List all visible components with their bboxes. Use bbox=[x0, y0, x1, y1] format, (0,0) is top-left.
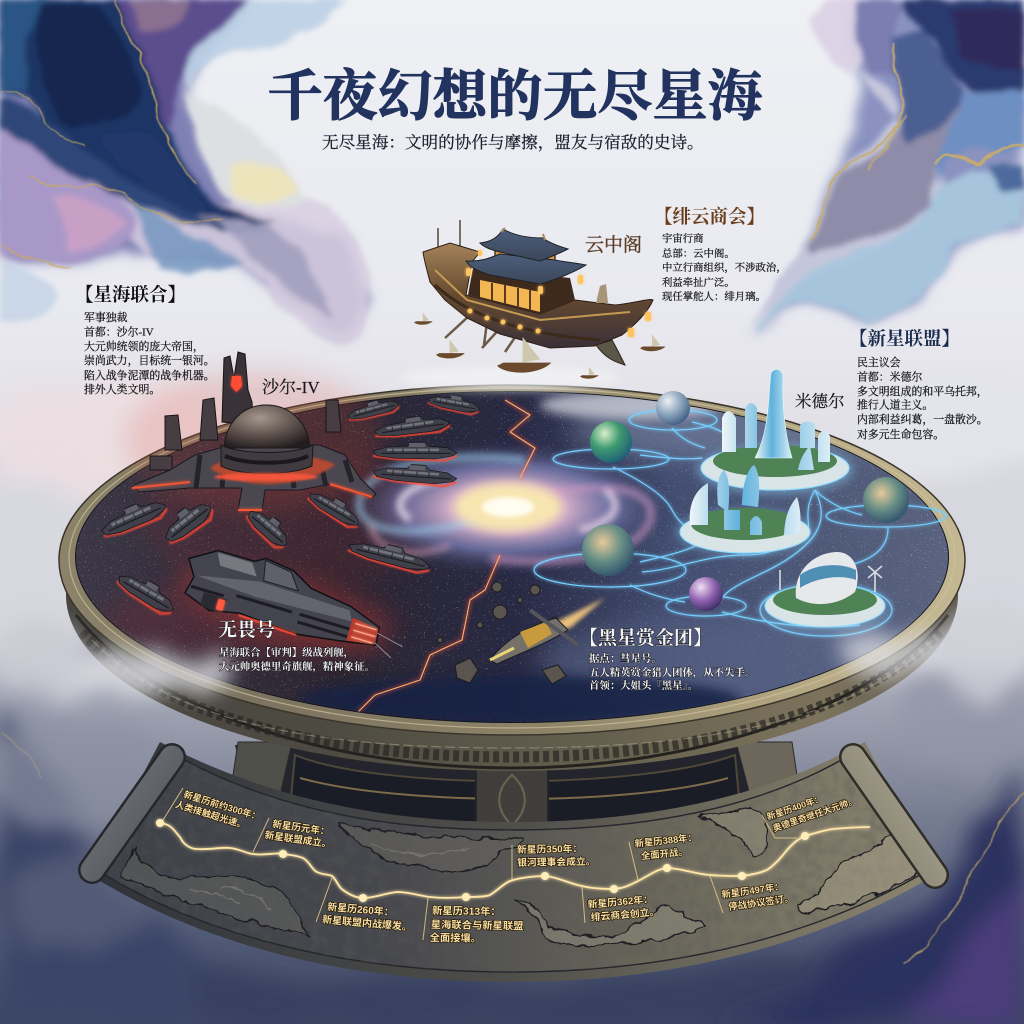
subtitle: 无尽星海：文明的协作与摩擦，盟友与宿敌的史诗。 bbox=[322, 133, 704, 152]
pedestal column: left bbox=[230, 742, 292, 795]
wash: pale tan bbox=[185, 95, 305, 209]
faction text: 星海联合: 首都：沙尔-IV bbox=[84, 324, 154, 338]
scroll lip bbox=[90, 742, 935, 982]
fleet: small warships bbox=[97, 391, 481, 618]
location label: 沙尔-IV: 沙尔-IV bbox=[262, 378, 320, 397]
faction text: 绯云商会: 宇宙行商 bbox=[662, 234, 704, 245]
cloud under ship bbox=[400, 366, 620, 390]
timeline labels: 新星联盟成立。 bbox=[264, 829, 332, 850]
faction text: 新星联盟: 对多元生命包容。 bbox=[857, 427, 944, 441]
comet ship bbox=[490, 598, 605, 664]
timeline nodes bbox=[156, 819, 809, 902]
dome bbox=[224, 405, 310, 448]
ink cloud: top left bbox=[0, 0, 370, 345]
timeline labels: 全面开战。 bbox=[640, 846, 688, 861]
round table bbox=[59, 385, 965, 771]
spires bbox=[222, 352, 253, 425]
faction text: 黑星赏金团: 【黑星赏金团】 bbox=[579, 627, 712, 649]
timeline labels: 新星历350年： bbox=[517, 844, 582, 856]
oars bbox=[445, 315, 520, 352]
ship text: 无畏号: 大元帅奥德里奇旗舰，精神象征。 bbox=[219, 660, 375, 673]
city: dome island bbox=[761, 552, 889, 632]
timeline labels: 新星历400年： bbox=[765, 793, 824, 822]
outer ring wall bbox=[132, 445, 376, 510]
faction text: 黑星赏金团 bbox=[579, 627, 755, 692]
small escort boats bbox=[414, 312, 666, 379]
fog patch on table bbox=[540, 391, 720, 419]
scroll roller: left bbox=[92, 757, 172, 870]
faction text: 黑星赏金团: 据点：彗星号。 bbox=[589, 654, 662, 665]
wash: purple top bbox=[112, 0, 248, 130]
faction text: 黑星赏金团: 首领：大姐头『黑星』。 bbox=[589, 679, 698, 692]
pagoda bbox=[468, 268, 575, 314]
galaxy bbox=[349, 443, 665, 572]
table top rim bbox=[59, 385, 965, 735]
wash: mauve tail bbox=[215, 218, 335, 320]
red fracture line bbox=[358, 400, 535, 712]
faction text: 新星联盟: 推行人道主义。 bbox=[857, 398, 933, 412]
ink cloud: lower left and bottom bbox=[0, 700, 1024, 1024]
faction text: 绯云商会: 总部：云中阁。 bbox=[662, 247, 735, 260]
faction text: 新星联盟: 内部利益纠葛，一盘散沙。 bbox=[857, 412, 988, 426]
faction text: 新星联盟: 民主议会 bbox=[857, 357, 901, 369]
faction text: 星海联合: 军事独裁 bbox=[84, 312, 128, 324]
city: central island bbox=[677, 465, 813, 554]
title: 千夜幻想的无尽星海 bbox=[267, 66, 763, 127]
faction text: 星海联合: 大元帅统领的庞大帝国， bbox=[84, 339, 204, 353]
timeline labels: 绯云商会创立。 bbox=[590, 905, 660, 924]
timeline labels: 新星历前约300年： bbox=[182, 789, 262, 822]
blue star lanes bbox=[534, 410, 946, 636]
wash: lilac left bbox=[0, 120, 135, 263]
relief carvings bbox=[120, 809, 925, 945]
timeline glowing path bbox=[160, 823, 870, 898]
table surface bbox=[76, 392, 948, 722]
timeline labels: 奥德里奇继任大元帅。 bbox=[771, 794, 858, 834]
wash: blue patch bbox=[0, 265, 55, 320]
timeline labels: 新星联盟内战爆发。 bbox=[322, 913, 412, 933]
faction text: 新星联盟: 【新星联盟】 bbox=[849, 329, 960, 350]
location label: 云中阁: 云中阁 bbox=[585, 234, 642, 256]
timeline labels: 新星历260年： bbox=[327, 902, 394, 919]
masts bbox=[438, 220, 460, 258]
timeline labels: 新星历497年： bbox=[721, 880, 784, 900]
planets bbox=[582, 391, 909, 611]
hull bbox=[423, 243, 653, 348]
ship text: 无畏号 bbox=[218, 619, 375, 673]
location label: 米德尔: 米德尔 bbox=[795, 392, 845, 411]
asteroids bbox=[438, 582, 566, 684]
faction text: 绯云商会: 现任掌舵人：绯月璃。 bbox=[662, 290, 766, 303]
timeline labels: 银河理事会成立。 bbox=[517, 855, 596, 869]
timeline scroll bbox=[90, 740, 940, 982]
gold veins bbox=[0, 0, 220, 266]
fog over table edges bbox=[0, 600, 1024, 700]
faction text: 新星联盟: 首都：米德尔 bbox=[857, 370, 922, 384]
lanterns bbox=[466, 250, 651, 337]
ship text: 无畏号: 星海联合【审判】级战列舰， bbox=[219, 648, 354, 659]
timeline labels bbox=[174, 782, 858, 946]
ink cloud: lower right bbox=[0, 730, 1024, 1024]
timeline labels: 新星历362年： bbox=[587, 894, 653, 911]
faction text: 星海联合: 陷入战争泥潭的战争机器。 bbox=[84, 368, 215, 382]
stern figure bbox=[596, 284, 608, 303]
gold veins bbox=[812, 45, 1024, 240]
faction text: 星海联合 bbox=[75, 285, 215, 396]
base wash bbox=[0, 0, 370, 340]
pedestal column: centre bbox=[476, 768, 548, 828]
faction text: 星海联合: 【星海联合】 bbox=[75, 285, 186, 306]
timeline labels: 新星历313年： bbox=[432, 906, 501, 918]
wash: lower lilac wisps bbox=[110, 195, 369, 345]
wash: pale blue top bbox=[184, 0, 345, 90]
timeline labels: 停战协议签订。 bbox=[728, 892, 794, 912]
base wash bbox=[755, 0, 1024, 335]
faction text: 新星联盟 bbox=[849, 329, 988, 441]
surface content bbox=[76, 391, 980, 724]
faction text: 绯云商会: 中立行商组织，不涉政治， bbox=[662, 261, 787, 274]
pedestal column: right bbox=[736, 742, 800, 795]
city: Mider capital bbox=[697, 369, 853, 494]
faction text: 绯云商会: 【绯云商会】 bbox=[654, 206, 765, 228]
timeline tick lines bbox=[163, 788, 797, 940]
fog banks bbox=[0, 380, 1024, 950]
timeline labels: 星海联合与新星联盟 bbox=[431, 918, 524, 933]
capital planet Shar-IV bbox=[125, 352, 385, 510]
timeline labels: 新星历元年： bbox=[272, 819, 330, 838]
ship text: 无畏号: 无畏号 bbox=[218, 619, 275, 641]
faction text: 黑星赏金团: 五人精英赏金猎人团体，从不失手。 bbox=[589, 666, 755, 679]
timeline labels: 新星历388年： bbox=[634, 832, 697, 849]
wash: navy bbox=[0, 0, 280, 224]
faction text: 星海联合: 排外人类文明。 bbox=[84, 382, 160, 396]
flagship: 无畏号 bbox=[168, 536, 416, 676]
faction text: 星海联合: 崇尚武力，目标统一银河。 bbox=[84, 353, 215, 367]
timeline labels: 全面接壤。 bbox=[429, 931, 481, 945]
faction text: 绯云商会: 利益牵扯广泛。 bbox=[662, 276, 735, 289]
table side band bbox=[66, 419, 958, 771]
scroll body bbox=[100, 752, 925, 972]
timeline labels: 人类接触超光速。 bbox=[174, 798, 248, 830]
ink cloud: top right bbox=[755, 0, 1024, 335]
scroll roller: right bbox=[853, 757, 935, 875]
faction text: 绯云商会 bbox=[654, 206, 787, 303]
faction text: 新星联盟: 多文明组成的和平乌托邦， bbox=[857, 384, 988, 398]
table pedestal bbox=[230, 742, 800, 845]
flying ship: Yunzhongge bbox=[400, 220, 653, 390]
